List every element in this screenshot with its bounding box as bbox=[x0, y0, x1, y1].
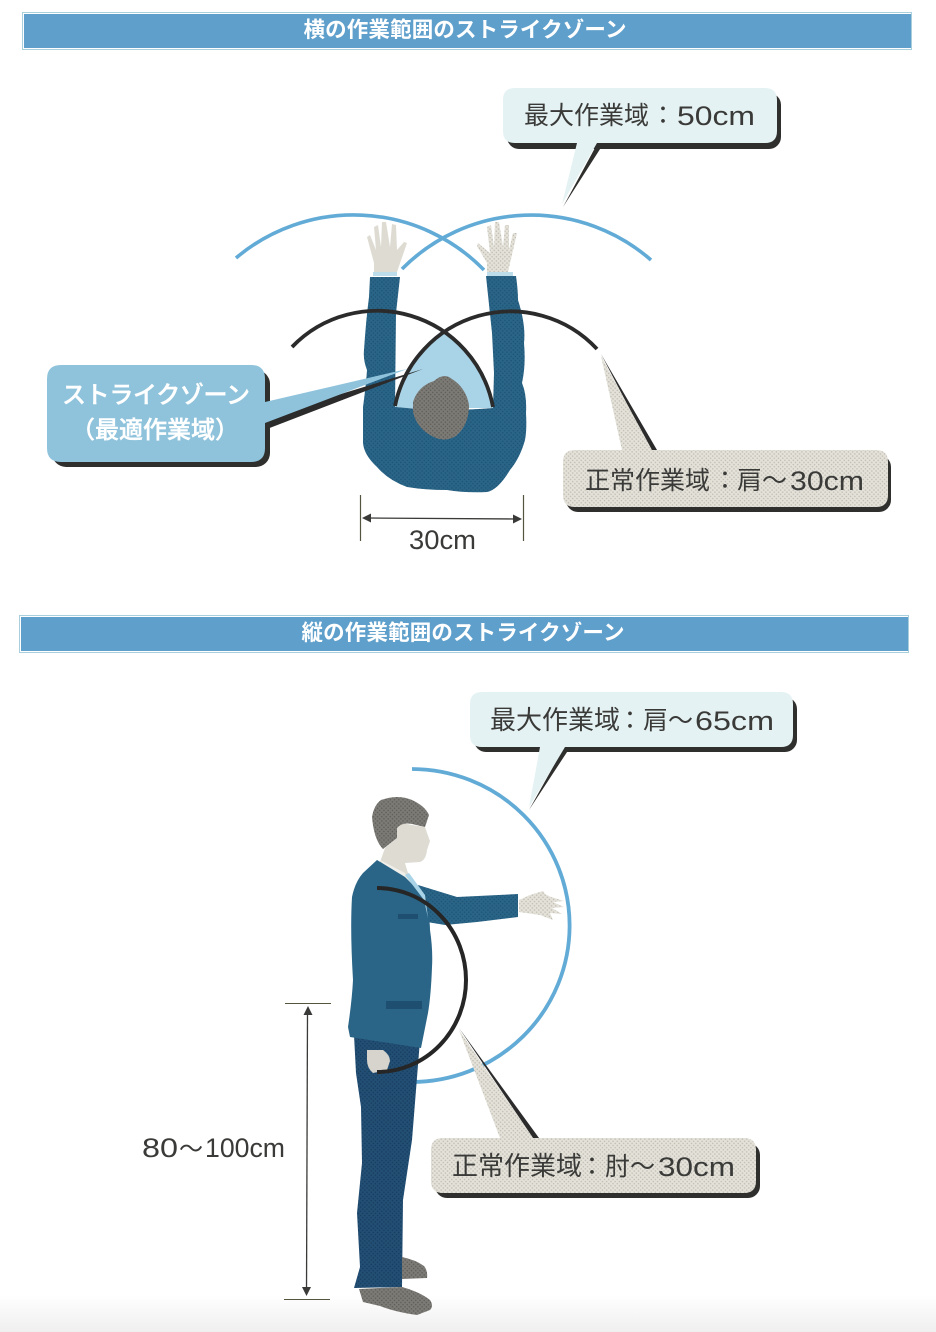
callout: normal work area shoulder to 30cm: 肩〜 bbox=[737, 461, 787, 497]
figure: worker body from above bbox=[363, 276, 526, 492]
callout: normal work area shoulder to 30cm: 30cm bbox=[790, 466, 864, 496]
arc: right maximum reach bbox=[402, 215, 651, 269]
callout: strike zone (optimal work area): ストライクゾーン bbox=[62, 375, 250, 410]
arc: left maximum reach bbox=[236, 215, 484, 270]
icon: extended hand bbox=[519, 891, 564, 920]
icon: left hand bbox=[367, 222, 407, 272]
callout: normal work area shoulder to 30cm bbox=[563, 354, 891, 512]
callout: max work area shoulder to 65cm bbox=[470, 692, 797, 810]
icon: fist bbox=[367, 1050, 390, 1073]
dimension: work height 80 to 100cm: 〜 bbox=[179, 1129, 203, 1164]
figure: head from above bbox=[413, 376, 469, 440]
callout: max work area 50cm bbox=[503, 88, 781, 207]
diagram: top view of worker and reach arcs bbox=[236, 215, 651, 492]
arc: right normal reach bbox=[395, 311, 597, 406]
callout: max work area shoulder to 65cm: 65cm bbox=[695, 706, 774, 736]
callout: max work area shoulder to 65cm: 肩〜 bbox=[643, 701, 693, 737]
figure: jacket pockets bbox=[386, 914, 422, 1009]
figure: trousers bbox=[354, 1035, 420, 1288]
icon: rear shoe bbox=[402, 1257, 427, 1279]
figure: hair bbox=[372, 797, 429, 849]
icon: right hand bbox=[477, 222, 517, 272]
dimension: work height 80 to 100cm bbox=[142, 1004, 331, 1300]
arc: normal reach bbox=[377, 888, 466, 1072]
callout: strike zone (optimal work area): （最適作業域） bbox=[71, 410, 239, 445]
callout: normal work area shoulder to 30cm: 正常作業域 bbox=[585, 461, 710, 497]
figure: jacket bbox=[348, 860, 432, 1048]
icon: left cuff bbox=[373, 272, 397, 276]
dimension: shoulder width 30cm bbox=[360, 495, 524, 555]
figure: tie bbox=[405, 873, 428, 918]
callout: max work area shoulder to 65cm: 最大作業域 bbox=[490, 700, 620, 737]
callout: normal work area elbow to 30cm: 正常作業域 bbox=[452, 1146, 582, 1183]
heading: vertical strike zone: 縦の作業範囲のストライクゾーン bbox=[302, 616, 624, 647]
diagram: side view of worker and reach arcs bbox=[348, 769, 570, 1315]
dimension: work height 80 to 100cm: 80 bbox=[142, 1133, 178, 1163]
callout: normal work area elbow to 30cm: 30cm bbox=[658, 1152, 735, 1182]
callout: normal work area elbow to 30cm: 肘〜 bbox=[605, 1147, 655, 1183]
callout: max work area 50cm: 50cm bbox=[677, 101, 755, 131]
icon: front shoe bbox=[359, 1287, 432, 1315]
heading: horizontal strike zone bbox=[22, 12, 912, 50]
callout: max work area 50cm: ： bbox=[650, 96, 676, 132]
arc: left normal reach bbox=[292, 311, 493, 407]
figure: face and neck bbox=[380, 824, 430, 880]
callout: max work area 50cm: 最大作業域 bbox=[524, 96, 649, 132]
callout: strike zone (optimal work area) bbox=[47, 365, 423, 467]
arc: maximum reach bbox=[411, 769, 570, 1082]
dimension: work height 80 to 100cm: 100cm bbox=[205, 1133, 285, 1163]
callout: normal work area shoulder to 30cm: ： bbox=[712, 461, 738, 497]
heading: horizontal strike zone: 横の作業範囲のストライクゾーン bbox=[304, 13, 626, 44]
zone: optimal work area fill bbox=[395, 330, 493, 408]
callout: normal work area elbow to 30cm: ： bbox=[579, 1147, 605, 1183]
figure: arm bbox=[418, 885, 518, 925]
dimension: shoulder width 30cm: 30cm bbox=[409, 525, 476, 555]
callout: normal work area elbow to 30cm bbox=[431, 1028, 760, 1198]
icon: right cuff bbox=[487, 272, 513, 276]
callout: max work area shoulder to 65cm: ： bbox=[617, 701, 643, 737]
figure: shirt collar bbox=[380, 860, 412, 885]
heading: vertical strike zone bbox=[20, 616, 908, 652]
